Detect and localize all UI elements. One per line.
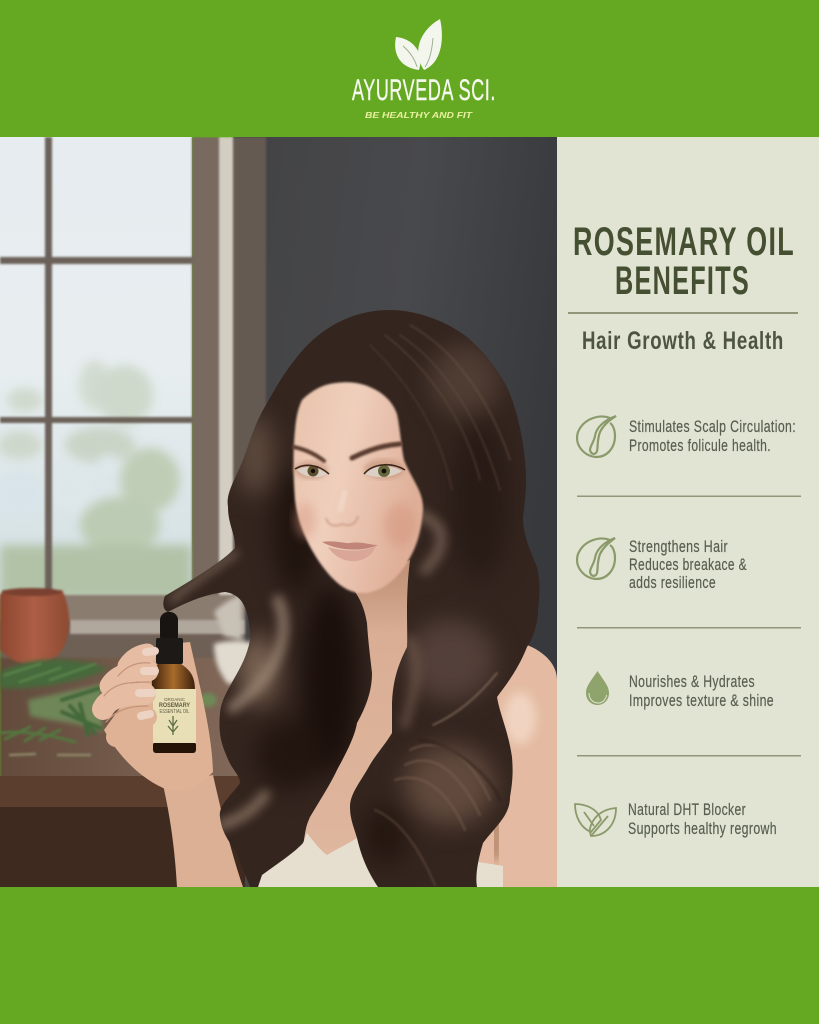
icon: hair follicle in circle bbox=[577, 416, 616, 457]
right shoulder bbox=[470, 645, 557, 887]
benefit 4 text: Natural DHT Blocker bbox=[628, 801, 746, 819]
highlight strands bbox=[172, 515, 441, 825]
window sill and ledge bbox=[0, 595, 245, 660]
bottle label bbox=[153, 689, 196, 743]
bottle label: ESSENTIAL OIL bbox=[160, 709, 190, 715]
lips bbox=[322, 541, 378, 561]
benefit 1 text: Promotes folicule health. bbox=[629, 437, 771, 455]
benefit 3: nourishes and hydrates bbox=[586, 671, 774, 710]
hair silhouette and shading bbox=[160, 300, 560, 890]
neck and chest bbox=[304, 560, 410, 860]
benefit 2 text: Strengthens Hair bbox=[629, 538, 728, 556]
nose bbox=[326, 490, 358, 526]
blurred trees outside bbox=[0, 360, 192, 600]
mortar bowl bbox=[202, 595, 250, 708]
fine strands bbox=[370, 325, 510, 885]
panel: benefits bbox=[557, 137, 819, 887]
benefit 4 text bbox=[628, 801, 777, 838]
blush bbox=[295, 502, 315, 538]
benefit 3 text: Nourishes & Hydrates bbox=[629, 673, 755, 691]
logo: Ayurveda Sci. bbox=[352, 19, 496, 120]
left eye bbox=[294, 461, 329, 479]
label rosemary sprig bbox=[168, 716, 178, 735]
table bbox=[0, 658, 245, 887]
benefit 2: strengthens hair bbox=[577, 538, 747, 592]
bottle label: ORGANIC bbox=[164, 697, 186, 702]
benefit 1 text bbox=[629, 418, 796, 455]
arm bbox=[163, 775, 243, 887]
face bbox=[294, 382, 423, 593]
benefit 2 text bbox=[629, 538, 747, 592]
divider under title bbox=[568, 312, 798, 314]
icon: logo leaves bbox=[395, 19, 442, 70]
bottle bbox=[152, 612, 196, 753]
hand bbox=[104, 642, 213, 791]
icon: twin leaves bbox=[575, 804, 616, 836]
benefit 4: DHT blocker bbox=[575, 801, 777, 838]
icon: hair strand in circle bbox=[577, 538, 615, 579]
window bbox=[0, 137, 266, 607]
bottle base bbox=[153, 742, 196, 753]
dress left side bbox=[258, 833, 378, 887]
benefit 1: scalp circulation bbox=[577, 416, 796, 457]
bottle label: ROSEMARY bbox=[159, 703, 190, 709]
broad shading masses bbox=[237, 345, 510, 865]
eyebrows bbox=[294, 444, 400, 461]
logo wordmark: AYURVEDA SCI. bbox=[352, 74, 496, 107]
right eye bbox=[364, 459, 405, 479]
fingers bbox=[103, 651, 155, 737]
benefit 3 text bbox=[629, 673, 774, 710]
wall bbox=[233, 137, 557, 887]
rosemary sprigs bbox=[0, 659, 108, 755]
benefit 2 text: adds resilience bbox=[629, 574, 716, 592]
clay pot bbox=[0, 588, 69, 664]
title bbox=[573, 220, 795, 303]
bottom green band bbox=[0, 887, 819, 1024]
dropper bulb bbox=[160, 612, 178, 638]
icon: water drop bbox=[586, 671, 609, 705]
logo tagline: BE HEALTHY AND FIT bbox=[365, 110, 473, 120]
top green band bbox=[0, 0, 819, 137]
benefit 2 text: Reduces breakace & bbox=[629, 556, 747, 574]
photo: woman with rosemary oil bottle bbox=[0, 137, 560, 890]
bottle collar bbox=[156, 638, 183, 664]
amber glass bbox=[152, 664, 195, 690]
dress right side bbox=[476, 862, 503, 887]
benefit 3 text: Improves texture & shine bbox=[629, 692, 774, 710]
